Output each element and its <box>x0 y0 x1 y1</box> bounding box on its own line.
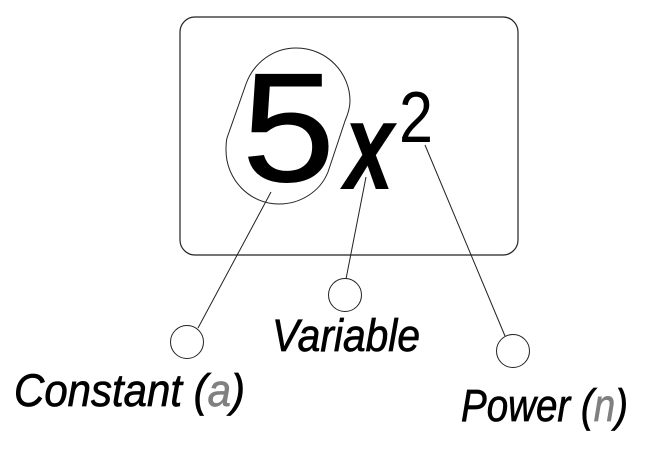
power digit 2: 2 <box>399 78 433 158</box>
panel: expression box <box>180 17 518 255</box>
connector: variable <box>346 177 366 279</box>
variable letter x: x <box>340 78 398 216</box>
label: constant (a): Constant (a) <box>14 365 245 416</box>
label: power (n): Power (n) <box>461 380 628 431</box>
node: power <box>496 334 530 368</box>
constant digit 5: 5 <box>242 41 335 214</box>
connector: constant <box>198 192 271 328</box>
node: constant <box>170 326 204 358</box>
outline around constant <box>226 48 350 204</box>
node: variable <box>328 278 362 312</box>
connector: power <box>425 145 505 336</box>
label: variable: Variable <box>272 310 420 361</box>
